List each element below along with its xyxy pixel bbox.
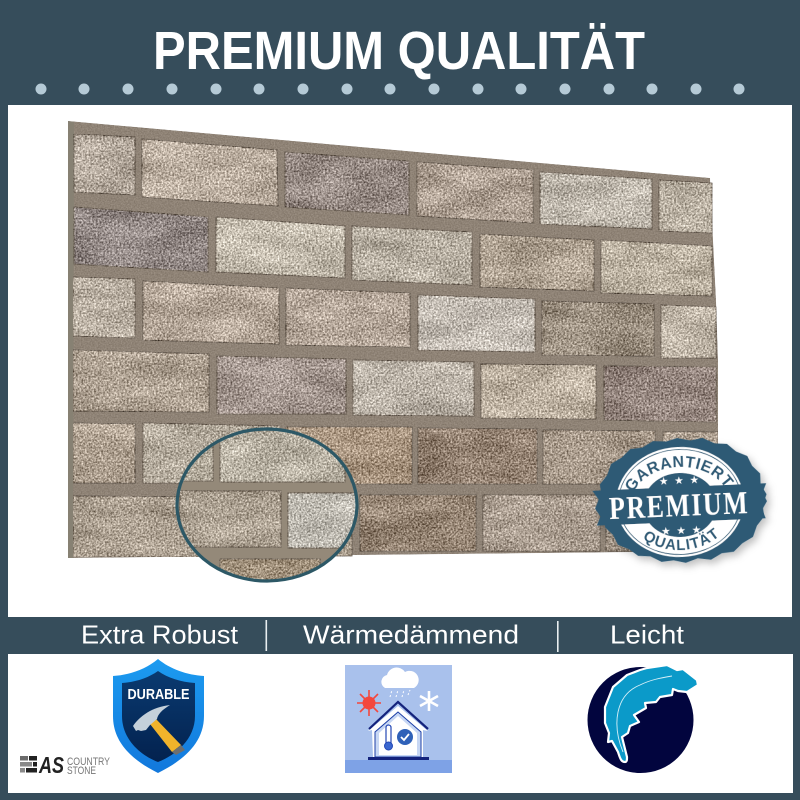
lens ring <box>177 429 357 581</box>
bricks <box>73 134 718 557</box>
panel: product photo background <box>8 105 792 617</box>
logo word: Country: COUNTRY <box>67 756 111 768</box>
snowflake <box>420 691 438 711</box>
hammer <box>133 705 185 755</box>
label: Leicht: Leicht <box>610 620 685 650</box>
divider 1 <box>266 620 267 651</box>
panel: icons <box>8 654 793 793</box>
house <box>368 706 428 758</box>
scalloped badge <box>596 434 769 566</box>
label: Extra Robust: Extra Robust <box>81 620 239 650</box>
stars bottom: ★ ★ ★ <box>661 524 702 538</box>
ribbon text: PREMIUM <box>608 484 750 526</box>
brand logo: AS Country Stone <box>20 752 111 778</box>
floor line <box>368 757 429 760</box>
lens contents <box>178 432 356 580</box>
rain <box>390 690 410 697</box>
magnifier lens <box>175 427 359 583</box>
thermometer <box>386 725 391 747</box>
arc text: Garantiert: GARANTIERT <box>626 456 734 490</box>
icon: durable shield <box>113 659 204 773</box>
feature labels band <box>81 620 685 652</box>
inner disc <box>642 471 718 539</box>
icon: house climate <box>345 665 452 773</box>
title: PREMIUM QUALITÄT <box>153 21 645 81</box>
arc text: Qualität: QUALITÄT <box>644 528 717 550</box>
check badge <box>397 729 413 745</box>
ribbon <box>592 483 768 526</box>
shield label: DURABLE <box>128 687 190 703</box>
cloud <box>381 668 419 688</box>
brick wall panel <box>68 121 718 558</box>
roof <box>369 702 428 729</box>
icon: feather <box>588 665 698 773</box>
label: Wärmedämmend: Wärmedämmend <box>303 620 519 650</box>
logo letters: AS <box>38 752 65 778</box>
divider 2 <box>557 621 559 652</box>
panel left edge <box>68 121 74 558</box>
stars top: ★ ★ ★ <box>659 474 700 488</box>
logo word: Stone: STONE <box>67 765 96 777</box>
premium seal <box>592 438 774 570</box>
mortar backing <box>68 121 718 558</box>
dotted divider <box>36 84 744 94</box>
white ring <box>614 444 746 560</box>
sun <box>357 690 381 716</box>
logo brick mark <box>20 756 37 772</box>
